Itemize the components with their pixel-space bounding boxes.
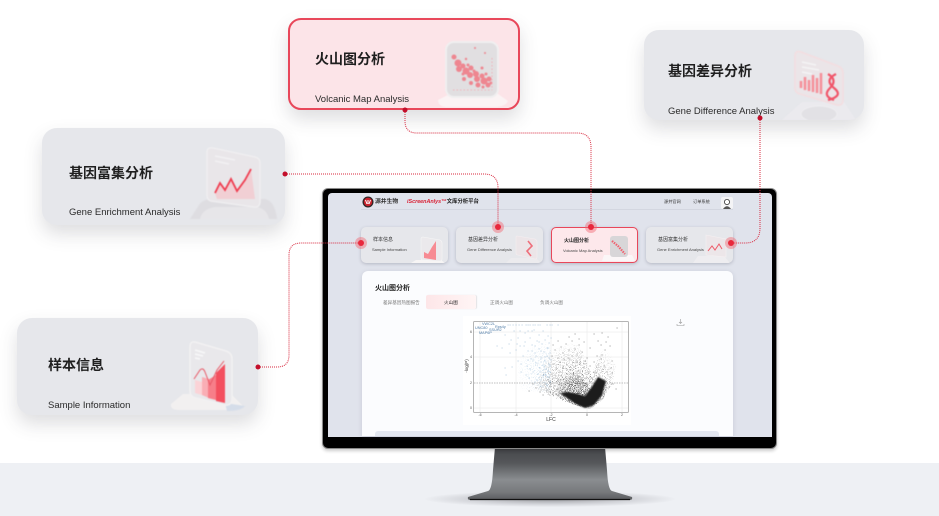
- axis labels: -6: [478, 413, 482, 417]
- speckle clouds: [515, 335, 616, 409]
- connector: volcano: [402, 108, 597, 233]
- gene labels: Rps4y: [495, 325, 506, 329]
- mini label: gene difference: 基因差异分析: [468, 237, 498, 243]
- tab: down volcano: 负调火山图: [540, 300, 563, 305]
- screen: [328, 193, 772, 437]
- axis labels: 0: [586, 413, 588, 417]
- gene labels: VWC2L: [482, 322, 495, 326]
- plot frame: [474, 322, 628, 412]
- mini subtitle: gene difference: Gene Difference Analysis: [467, 247, 512, 252]
- mini subtitle: gene enrichment: Gene Enrichment Analysis: [657, 247, 704, 252]
- axis labels: 4: [470, 355, 472, 359]
- monitor: [322, 188, 777, 449]
- card: volcano map analysis: [288, 18, 520, 110]
- icon: avatar: [721, 197, 733, 209]
- mini card: gene difference: [456, 227, 543, 263]
- card: sample information: [17, 318, 258, 415]
- card title: 基因富集分析: [69, 165, 153, 181]
- axis labels: LFC: [546, 417, 556, 423]
- mini card: gene enrichment: [646, 227, 733, 263]
- axis labels: -2: [550, 413, 553, 417]
- brand name: 源井生物: [375, 199, 398, 205]
- mini illustration: gene enrichment: [706, 235, 730, 263]
- connector: gene difference: [725, 116, 762, 249]
- mini subtitle: volcano: Volcanic Map Analysis: [563, 248, 603, 253]
- axis labels: 2: [621, 413, 623, 417]
- mini label: gene enrichment: 基因富集分析: [658, 237, 688, 243]
- mini card: volcano map, active: [551, 227, 638, 263]
- panel heading: 火山图分析: [375, 285, 410, 292]
- panel: volcano analysis: [362, 271, 733, 436]
- card title: 样本信息: [48, 357, 104, 373]
- card subtitle: Gene Enrichment Analysis: [69, 207, 180, 218]
- card subtitle: Gene Difference Analysis: [668, 106, 774, 117]
- card title: 基因差异分析: [668, 63, 752, 79]
- axis labels: -log(P): [464, 359, 469, 373]
- axis labels: 0: [470, 406, 472, 410]
- screen header: [361, 194, 733, 210]
- nav: website: 源井官网: [664, 199, 681, 204]
- icon: download: [676, 319, 684, 326]
- blue points: [497, 325, 558, 386]
- illustration: enrichment glass tile: [192, 150, 276, 218]
- active tab background: [426, 295, 476, 309]
- card: gene difference analysis: [644, 30, 864, 120]
- illustration: volcano glass tile: [438, 42, 508, 107]
- mini label: sample: 样本信息: [373, 237, 393, 243]
- axis labels: -4: [514, 413, 518, 417]
- connector: sample: [256, 237, 367, 370]
- platform name: iScreenAnlys™文库分析平台: [407, 199, 479, 205]
- axis labels: 6: [470, 330, 472, 334]
- illustration: sample glass tile: [172, 342, 244, 411]
- icon: logo: [362, 196, 374, 208]
- monitor stand: [468, 449, 632, 500]
- gene labels: UNC80: [475, 326, 487, 330]
- card subtitle: Volcanic Map Analysis: [315, 94, 409, 105]
- card subtitle: Sample Information: [48, 400, 130, 411]
- axis labels: 2: [470, 381, 472, 385]
- mini card: sample information: [361, 227, 448, 263]
- mini illustration: sample: [412, 237, 444, 263]
- gene labels: SSUH2: [489, 328, 502, 332]
- gene labels: [475, 322, 506, 335]
- volcano plot: [464, 321, 629, 423]
- dense V of points: [560, 377, 606, 408]
- bottom strip: [375, 431, 719, 436]
- ground band: [0, 463, 939, 516]
- tab: volcano: 火山图: [444, 300, 458, 305]
- mini illustration: gene difference: [516, 236, 540, 263]
- card title: 火山图分析: [315, 51, 385, 67]
- nav: orders: 订单系统: [693, 199, 710, 204]
- black points: [529, 328, 617, 396]
- tab: heatmap: 差异基因热图报告: [383, 300, 420, 305]
- connector: gene enrichment: [282, 172, 504, 233]
- card: gene enrichment analysis: [42, 128, 285, 225]
- axis labels: [464, 330, 623, 423]
- tab: up volcano: 正调火山图: [490, 300, 513, 305]
- mini illustration: volcano: [602, 236, 635, 261]
- mini label: volcano: 火山图分析: [564, 238, 589, 244]
- illustration: DNA glass tile: [794, 51, 844, 106]
- stand shadow: [425, 491, 675, 507]
- gene labels: MAP6P: [479, 331, 492, 335]
- mini subtitle: sample: Sample Information: [372, 247, 407, 252]
